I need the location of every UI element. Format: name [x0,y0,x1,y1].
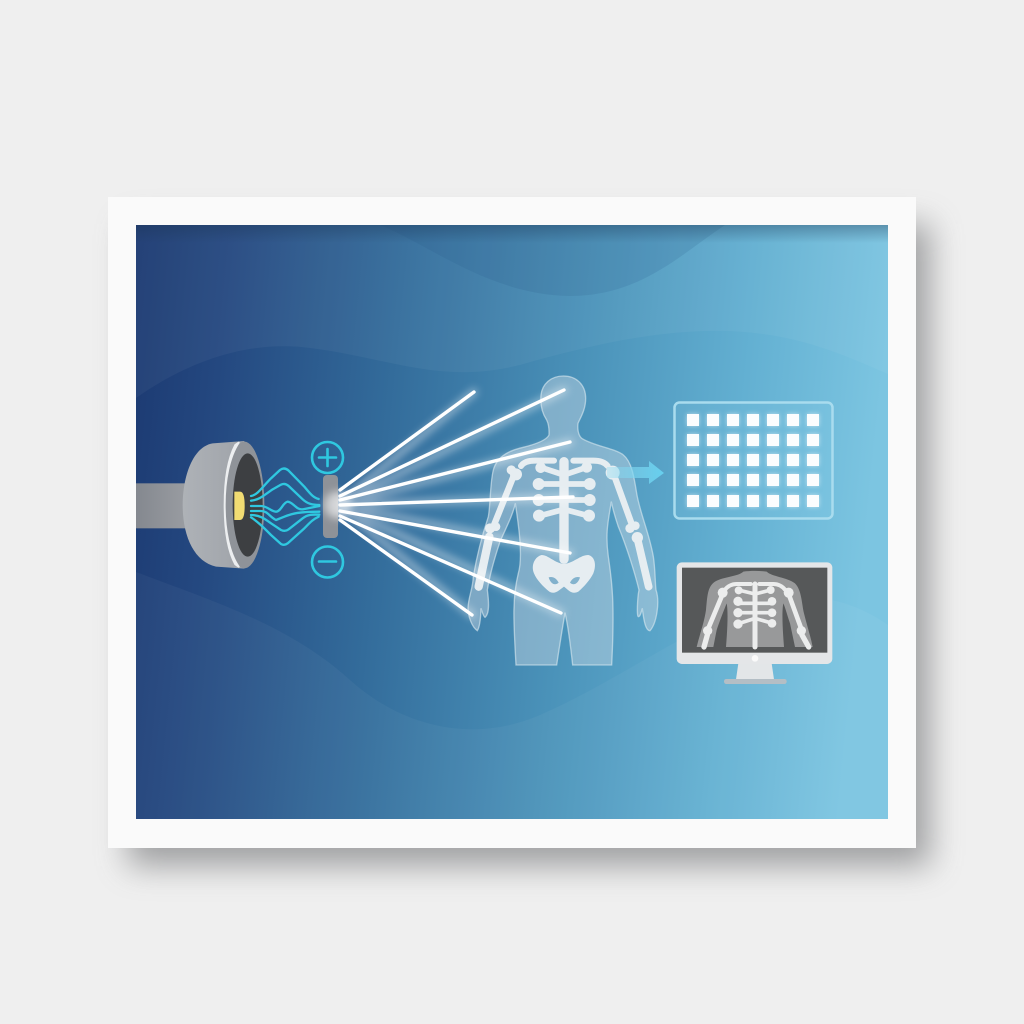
frame shadow [128,224,930,866]
picture frame [108,197,916,848]
inner dark cavity [233,453,263,557]
middle wave [136,238,358,398]
electron stream lines [251,468,319,545]
top shading [136,225,888,240]
icon: plus circle [312,442,343,473]
beam glow [338,390,573,615]
monitor bezel [677,562,832,664]
x-ray bones [704,584,809,647]
x-ray beams [324,390,573,615]
top wave [516,225,724,296]
x-ray torso [697,571,813,647]
anode plate [323,475,338,538]
tube housing [183,441,244,569]
pelvis [533,555,595,593]
tube arm [136,483,191,528]
bottom wave [136,572,888,819]
monitor screen [682,568,827,653]
left arm bones [493,475,514,528]
monitor with x-ray image [677,562,832,684]
arrow to detector [607,461,664,484]
skeleton [479,461,649,593]
grid squares [687,414,819,507]
monitor stand [736,663,774,679]
spine [550,462,578,559]
beam lines [340,390,573,615]
icon: minus circle [312,546,343,578]
detector grid panel [674,402,832,518]
translucent human body [468,376,658,665]
white rim highlight [225,443,239,567]
right arm bones [614,475,633,527]
panel: blue gradient background [136,225,888,819]
origin glow [324,491,352,519]
grid glow [687,414,819,507]
front rim [224,442,264,568]
collar bones [521,461,608,466]
x-ray tube [136,441,264,569]
ribs [539,467,590,516]
yellow filament [234,492,245,520]
